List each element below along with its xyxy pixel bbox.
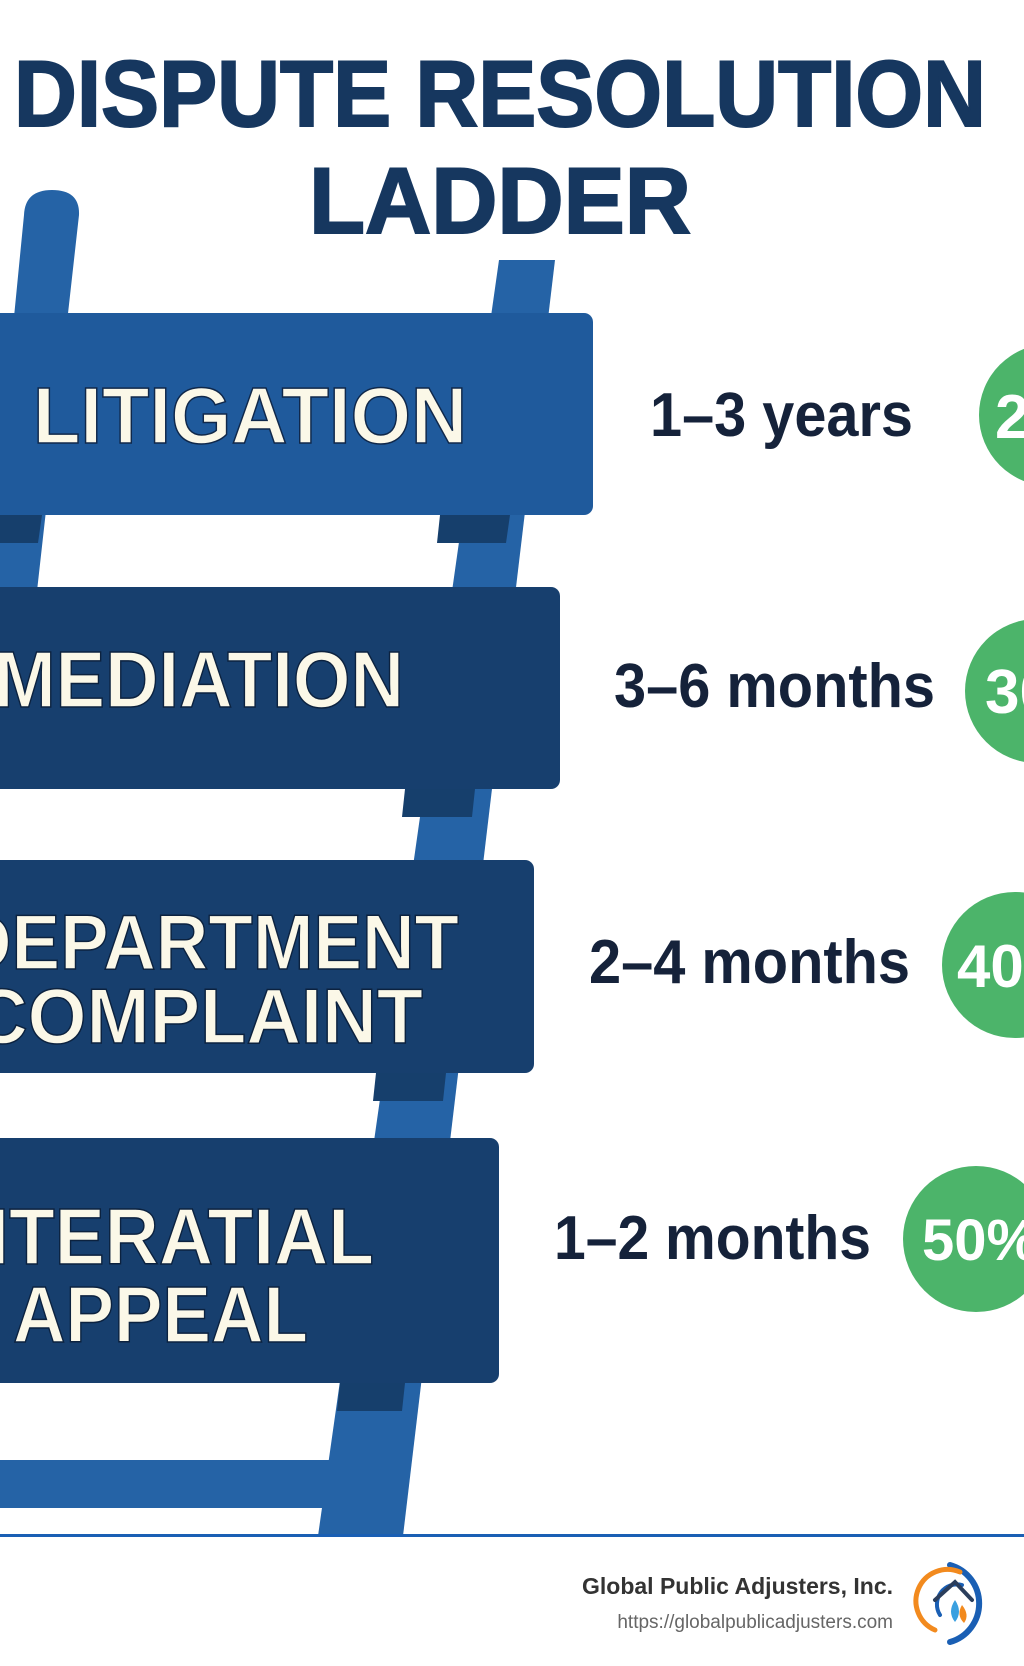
title [14, 41, 986, 253]
durations: 3–6 months [614, 652, 935, 721]
icon: logo [916, 1565, 979, 1642]
panel: department complaint [0, 860, 534, 1073]
ladder rails [0, 190, 555, 1536]
durations [554, 381, 935, 1273]
footer text: https://globalpublicadjusters.com [617, 1612, 893, 1633]
panel: interatial appeal [0, 1138, 499, 1383]
success rate circles [903, 344, 1024, 1312]
footer text: Global Public Adjusters, Inc. [582, 1573, 893, 1599]
durations: 1–3 years [650, 381, 913, 450]
panel: litigation [0, 313, 593, 515]
panel: mediation [0, 587, 560, 789]
bottom rung [0, 1460, 335, 1508]
panel: interatial appeal: APPEAL [13, 1270, 308, 1359]
panel: mediation: MEDIATION [0, 635, 404, 724]
title: LADDER [309, 148, 691, 253]
durations: 2–4 months [589, 928, 910, 997]
footer text [582, 1573, 893, 1633]
durations: 1–2 months [554, 1204, 871, 1273]
footer divider [0, 1534, 1024, 1537]
panel: litigation: LITIGATION [33, 371, 467, 460]
